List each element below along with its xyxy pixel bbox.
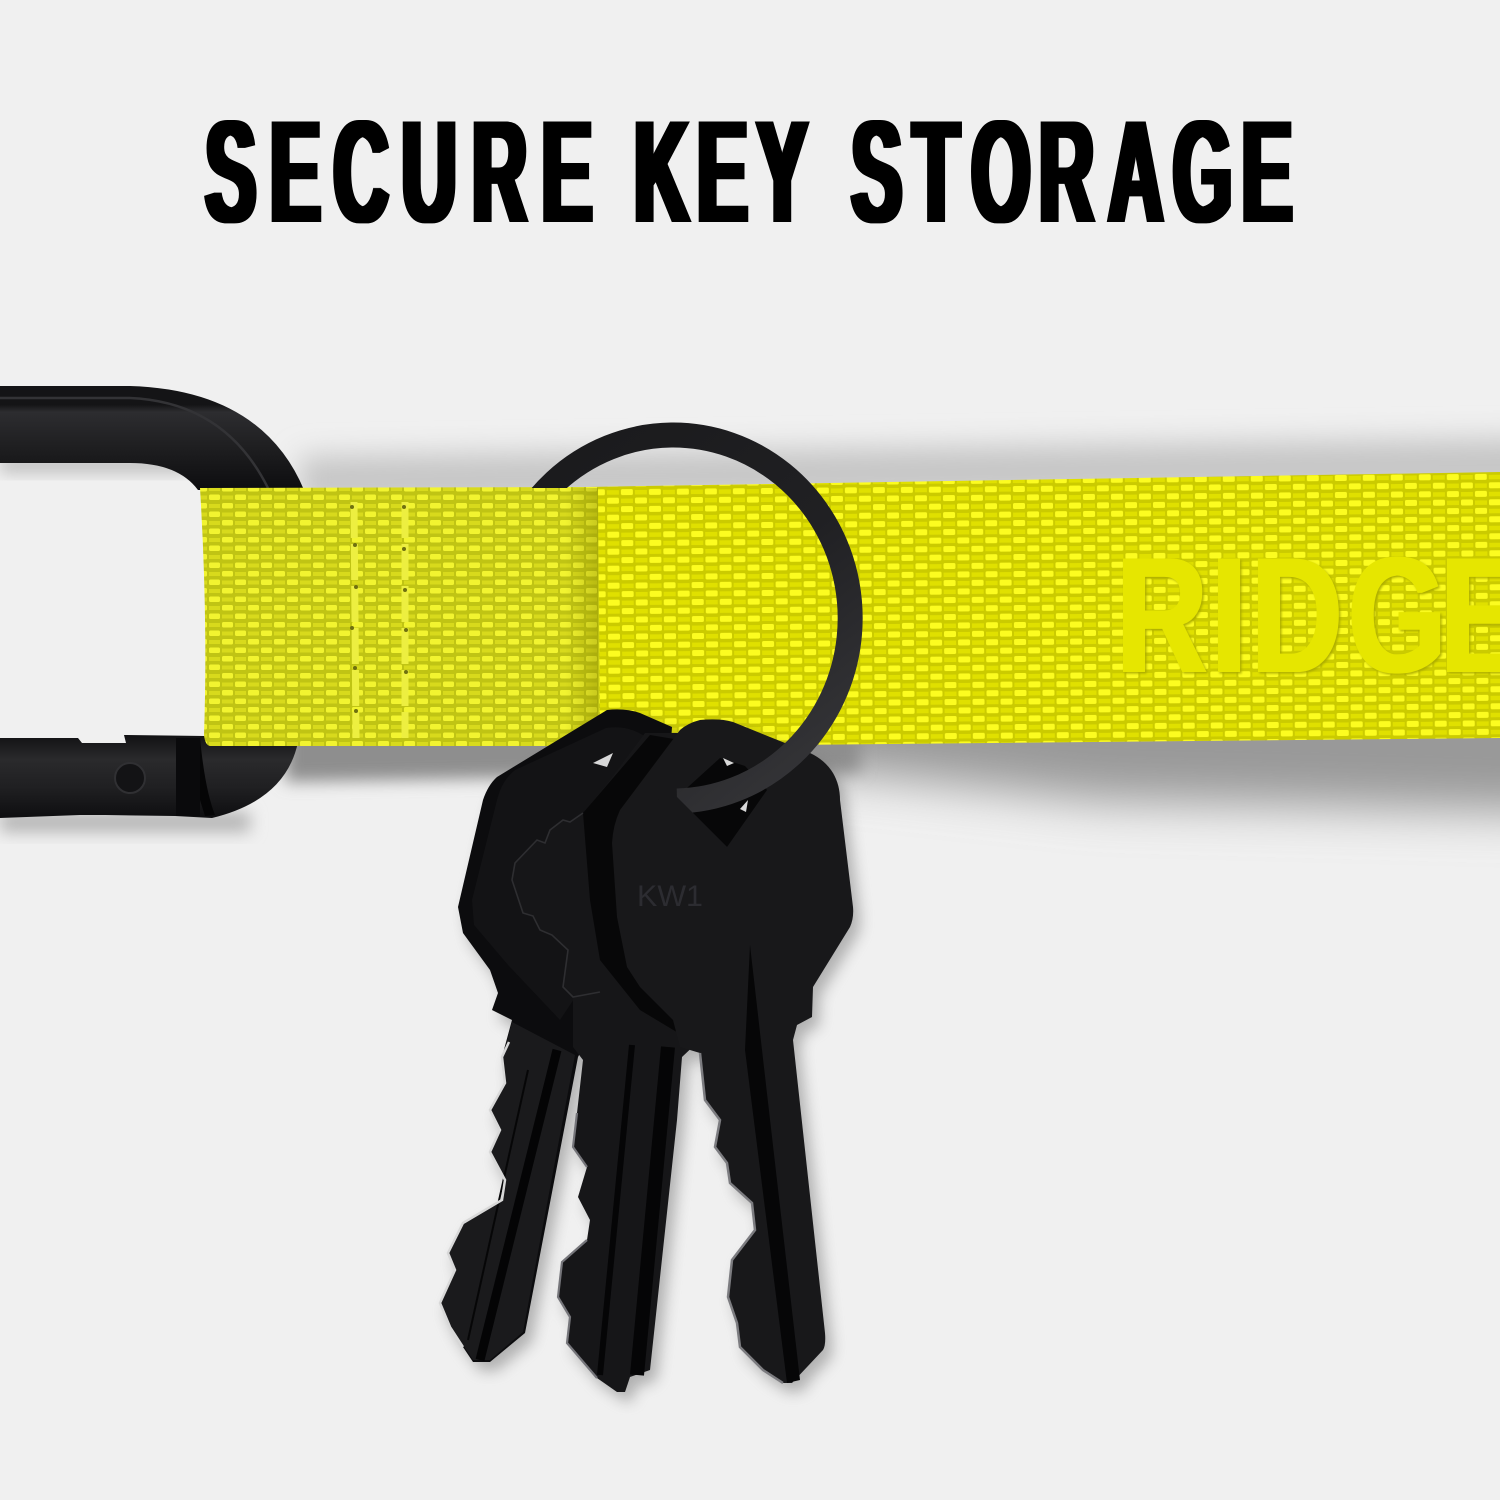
middle key bitting edge [558,1113,597,1378]
middle key head shadow [583,735,690,1040]
back key gap [593,753,613,767]
key hole lip over ring [655,797,727,852]
key blade groove [745,945,800,1383]
title: SECURE KEY STORAGE [205,90,1292,253]
yellow webbing strap [200,472,1500,747]
back key head face [472,727,650,1020]
front key [612,719,853,1383]
gate pin [115,763,145,793]
middle key bumps outline [512,813,600,997]
strap shadows [0,436,1500,832]
stitching [354,502,405,738]
middle key [512,733,700,1392]
back key blade face [441,1022,575,1360]
back key [440,709,672,1362]
keys [440,709,853,1392]
main strap section [585,472,1500,747]
carabiner [0,386,304,818]
carabiner upper arm [0,386,304,490]
folded strap section [200,487,600,746]
split ring [518,435,850,801]
back key silver edge [440,1042,509,1347]
carabiner lower arm and gate [0,735,298,818]
front key bitting edge [700,1053,783,1383]
key hole [677,758,767,847]
key stamp: KW1 [637,880,703,913]
